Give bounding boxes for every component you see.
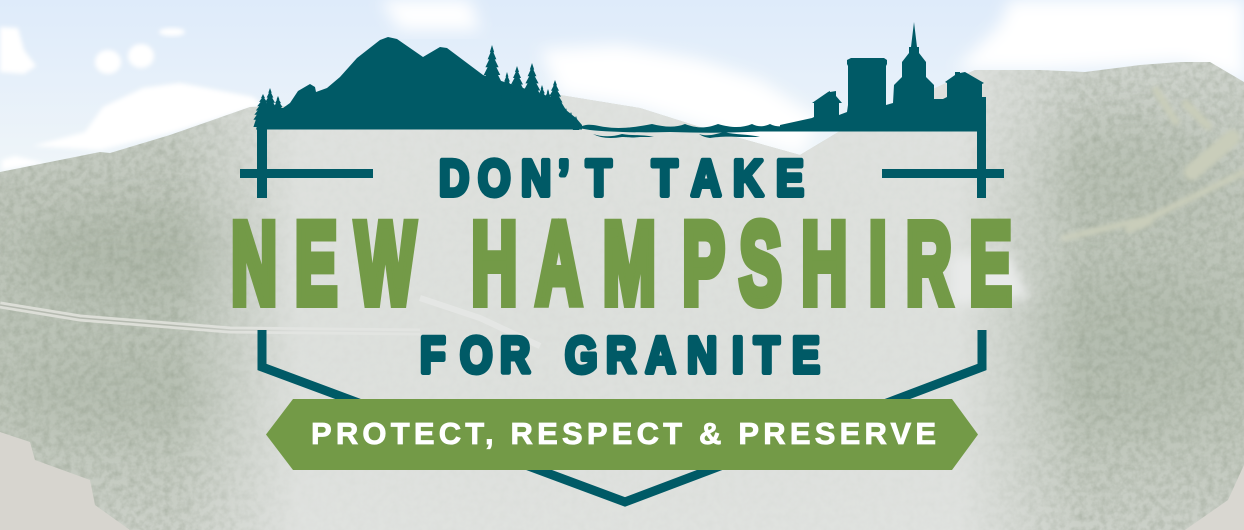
heading: don't take: DON’T TAKE [439,150,804,206]
ski trails [1064,90,1244,238]
heading: for granite: FOR GRANITE [420,327,820,383]
town skyline [780,22,986,132]
shield frame: lower chevron [262,330,982,502]
shield frame: top corners [240,129,1004,198]
trees right [481,45,579,130]
banner shape [266,399,978,470]
skyline band: mountains and forest [253,22,986,138]
clouds [0,0,1244,170]
rock outcrop right [1185,465,1244,530]
forest shading [38,128,1192,399]
mountain silhouette [256,37,582,130]
rock outcrop left [0,432,130,530]
banner [266,399,978,470]
lake [950,255,1030,306]
trees left [253,88,286,128]
heading: new hampshire: NEW HAMPSHIRE [231,199,1012,328]
water waves [578,124,792,138]
banner slogan: PROTECT, RESPECT & PRESERVE [311,416,936,451]
sky [0,0,1244,180]
valley road [0,298,540,346]
logo badge [231,22,1012,502]
white wash over the centre [192,70,1063,530]
